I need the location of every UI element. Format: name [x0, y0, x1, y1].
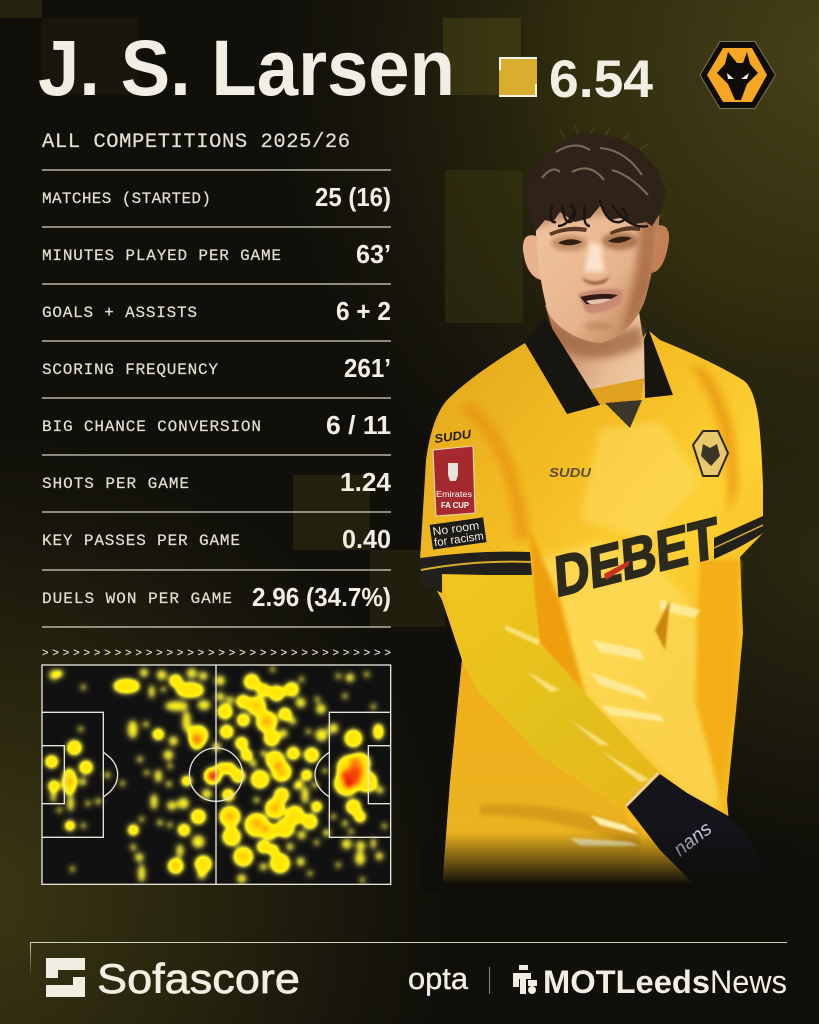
icon: club crest [700, 42, 776, 108]
stats table [42, 170, 392, 627]
flyaway strands [560, 126, 648, 150]
stat: scoring frequency [42, 353, 391, 383]
photo fade [420, 830, 790, 892]
hair highlights [542, 145, 648, 195]
No room for racism patch: No room [432, 520, 480, 538]
mouth [578, 289, 623, 313]
rating value: 6.54 [549, 50, 654, 109]
left sleeve band [420, 552, 532, 593]
stat: shots: 1.24 [340, 467, 392, 497]
MOT Leeds News wordmark: MOTLeeds [543, 964, 710, 1000]
glove: nans [670, 818, 716, 861]
stat: matches: MATCHES (STARTED) [42, 190, 211, 208]
stat: minutes: 63’ [356, 239, 391, 269]
stat: key passes: KEY PASSES PER GAME [42, 532, 240, 550]
title: J. S. Larsen [38, 23, 455, 112]
heatmap [42, 665, 391, 884]
DEBET sponsor: DEBET [552, 505, 720, 609]
glove [626, 773, 775, 890]
neck [545, 305, 648, 403]
chest sponsor logo: SUDU [549, 465, 592, 480]
stat: matches: 25 (16) [315, 182, 391, 212]
stat: big chance conversion: BIG CHANCE CONVERSION [42, 418, 261, 436]
pitch lines [42, 665, 391, 884]
stat: matches [42, 182, 391, 212]
stat: scoring frequency: SCORING FREQUENCY [42, 361, 218, 379]
No room for racism patch [430, 517, 487, 550]
opta logo: opta [408, 961, 469, 996]
Sofascore wordmark: Sofascore [97, 955, 300, 1002]
stat: minutes [42, 239, 391, 269]
player photo [420, 126, 790, 892]
right sleeve band [714, 516, 763, 559]
stat: scoring frequency: 261’ [344, 353, 391, 383]
right ear [652, 225, 669, 273]
stat: goals and assists: 6 + 2 [336, 296, 391, 326]
face [536, 206, 660, 343]
subtitle: ALL COMPETITIONS 2025/26 [42, 131, 350, 154]
hair [526, 126, 666, 232]
stat: big chance conversion [42, 410, 391, 440]
attack direction chevrons: >>>>>>>>>>>>>>>>>>>>>>>>>>>>>>>>>> [42, 648, 391, 660]
stat: minutes: MINUTES PLAYED PER GAME [42, 247, 281, 265]
stat: duels won: DUELS WON PER GAME [42, 590, 232, 608]
stat: shots: SHOTS PER GAME [42, 475, 189, 493]
footer divider [489, 967, 490, 994]
undershirt collar [587, 378, 645, 405]
footer rule [30, 942, 787, 976]
FA Cup patch: Emirates [436, 490, 472, 499]
stat: goals and assists [42, 296, 391, 326]
arm folds [505, 625, 650, 782]
sleeve sponsor: SUDU [433, 427, 472, 446]
stat: shots [42, 467, 392, 497]
Sofascore logo mark [46, 958, 85, 997]
left ear [523, 235, 541, 280]
forelock curls [551, 200, 648, 227]
stat: goals and assists: GOALS + ASSISTS [42, 304, 197, 322]
stat: big chance conversion: 6 / 11 [326, 410, 391, 440]
stat: duels won: 2.96 (34.7%) [252, 582, 391, 612]
stat: duels won [42, 582, 391, 612]
MOT icon [513, 965, 537, 994]
FA Cup patch [433, 446, 475, 516]
left arm [442, 575, 660, 807]
No room for racism patch: for racism [433, 531, 485, 549]
stat: key passes [42, 524, 391, 554]
torso shading [442, 365, 740, 890]
FA Cup patch: FA CUP [441, 500, 469, 510]
MOT Leeds News wordmark: News [710, 964, 787, 1000]
chest crest [693, 431, 728, 476]
stat: key passes: 0.40 [342, 524, 391, 554]
rating square [499, 57, 537, 97]
shirt collar [525, 317, 673, 428]
eyes and brows [549, 226, 640, 245]
player torso [420, 330, 763, 890]
